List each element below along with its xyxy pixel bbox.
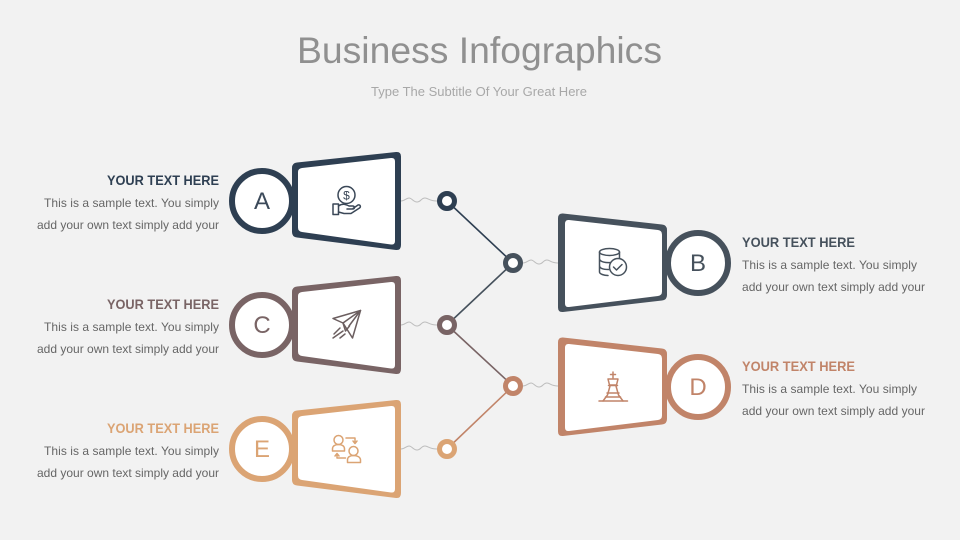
text block C: YOUR TEXT HERE <box>107 296 219 312</box>
panel: E <box>37 400 454 498</box>
node A <box>440 194 454 208</box>
text block C <box>37 296 219 356</box>
trapezoid card C <box>292 276 401 374</box>
circle A <box>232 171 292 231</box>
trapezoid card B <box>558 213 667 312</box>
circle E <box>232 419 292 479</box>
text block E <box>37 420 219 480</box>
text block B: YOUR TEXT HERE <box>742 234 855 250</box>
panel: D <box>506 337 925 436</box>
squiggle E <box>401 446 437 450</box>
icon: chess king <box>599 372 628 401</box>
squiggle C <box>401 322 437 326</box>
circle C <box>232 295 292 355</box>
text block A <box>37 172 219 232</box>
letter A: A <box>254 188 270 215</box>
text block E: YOUR TEXT HERE <box>107 420 219 436</box>
letter B: B <box>690 250 706 277</box>
node D <box>506 378 520 394</box>
letter E: E <box>254 436 270 463</box>
squiggle B <box>523 260 558 264</box>
circle D <box>668 357 728 417</box>
trapezoid card E <box>292 400 401 498</box>
panel: A <box>37 152 454 250</box>
panel: B <box>506 213 925 312</box>
title: Business Infographics <box>297 30 662 71</box>
text block E: This is a sample text. You simply <box>44 444 219 458</box>
text block D <box>742 358 925 418</box>
node C <box>440 318 454 332</box>
text block D: add your own text simply add your <box>742 404 925 418</box>
connector lines <box>447 201 513 449</box>
icon: hand holding coin: $ <box>343 188 350 202</box>
icon: hand holding coin <box>333 186 360 214</box>
trapezoid card A <box>292 152 401 250</box>
circle B <box>668 233 728 293</box>
text block C: This is a sample text. You simply <box>44 320 219 334</box>
icon: database check <box>600 248 626 276</box>
letter C: C <box>253 312 271 339</box>
text block C: add your own text simply add your <box>37 342 219 356</box>
node B <box>506 256 520 270</box>
subtitle: Type The Subtitle Of Your Great Here <box>371 84 587 99</box>
letter D: D <box>689 374 707 401</box>
text block A: YOUR TEXT HERE <box>107 172 219 188</box>
panel: C <box>37 276 454 374</box>
squiggle A <box>401 198 437 202</box>
text block E: add your own text simply add your <box>37 466 219 480</box>
text block B <box>742 234 925 294</box>
icon: paper plane <box>333 310 360 338</box>
text block B: add your own text simply add your <box>742 280 925 294</box>
text block D: This is a sample text. You simply <box>742 382 917 396</box>
trapezoid card D <box>558 337 667 436</box>
node E <box>440 442 454 456</box>
text block A: add your own text simply add your <box>37 218 219 232</box>
squiggle D <box>523 383 558 387</box>
text block B: This is a sample text. You simply <box>742 258 917 272</box>
text block A: This is a sample text. You simply <box>44 196 219 210</box>
icon: people exchange <box>332 436 360 462</box>
text block D: YOUR TEXT HERE <box>742 358 855 374</box>
